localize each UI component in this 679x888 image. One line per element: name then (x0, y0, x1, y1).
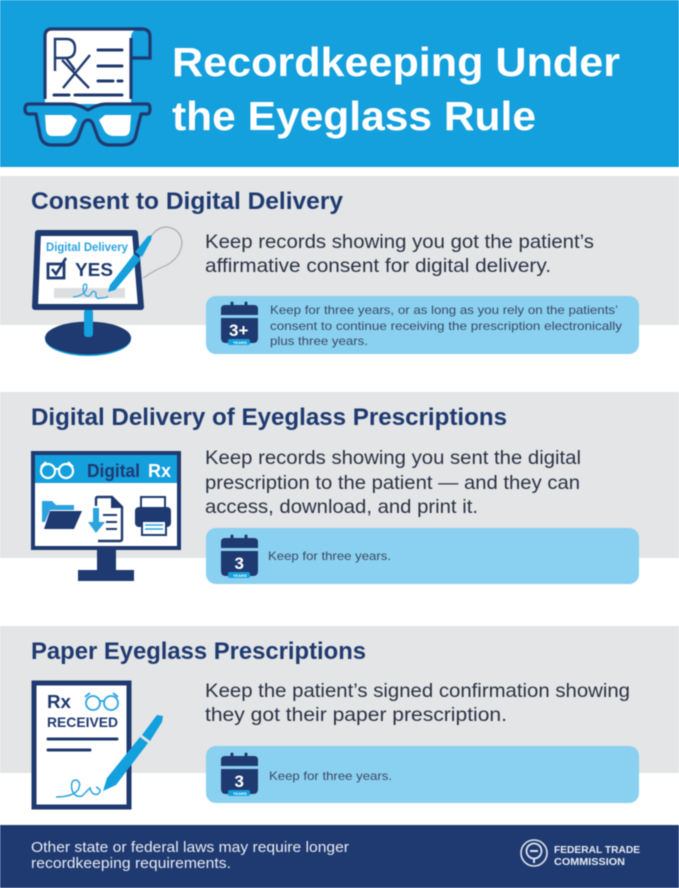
body text: Keep records showing you sent the digital (205, 447, 581, 469)
icon: computer monitor (33, 453, 179, 581)
icon: signed paper document: Rx (47, 692, 71, 712)
callout: retention period: plus three years. (270, 334, 368, 348)
heading: Digital Delivery of Eyeglass Prescriptions (31, 404, 507, 431)
icon: computer monitor: Rx (148, 461, 171, 481)
body text (205, 680, 630, 726)
footer note: recordkeeping requirements. (31, 855, 231, 872)
FTC logo: COMMISSION (554, 857, 625, 868)
header band (0, 0, 679, 167)
body text (205, 231, 594, 277)
body text: they got their paper prescription. (205, 704, 507, 726)
callout: retention period (206, 296, 639, 354)
icon: computer monitor: Digital (87, 461, 140, 481)
icon: calendar 3 (221, 754, 258, 796)
callout: retention period: Keep for three years. (268, 549, 391, 563)
title: Recordkeeping Under (172, 39, 620, 85)
FTC logo (521, 840, 640, 868)
FTC logo: FEDERAL TRADE (554, 845, 640, 856)
heading: Consent to Digital Delivery (31, 188, 344, 215)
callout: retention period: Keep for three years, or as long as you rely on the patients’ (270, 303, 618, 317)
callout: retention period: consent to continue receiving the prescription electronically (270, 319, 622, 333)
icon: calendar 3: 3 (234, 772, 244, 791)
icon: calendar 3: YEARS (233, 573, 247, 578)
icon: calendar 3+: YEARS (233, 340, 247, 345)
panel: paper eyeglass prescriptions (0, 626, 679, 807)
icon: signature tablet: Digital Delivery (46, 242, 129, 254)
icon: signed paper document (34, 683, 163, 807)
body text: affirmative consent for digital delivery. (205, 255, 551, 277)
body text: Keep records showing you got the patient’s (205, 231, 594, 253)
icon: calendar 3: YEARS (233, 791, 247, 796)
body text: Keep the patient’s signed confirmation showing (205, 680, 630, 702)
title: the Eyeglass Rule (172, 93, 536, 139)
callout: retention period (206, 528, 639, 584)
footer note: Other state or federal laws may require longer (31, 839, 349, 856)
icon: calendar 3+: 3+ (229, 321, 248, 340)
footer band (0, 825, 679, 888)
title (172, 39, 620, 139)
body text: prescription to the patient — and they can (205, 472, 580, 494)
icon: prescription and glasses (25, 29, 150, 145)
icon: signature tablet (35, 227, 182, 356)
icon: signature tablet: YES (75, 260, 113, 280)
body text (205, 447, 581, 518)
callout: retention period (206, 746, 639, 803)
icon: calendar 3 (221, 536, 258, 578)
footer note (31, 839, 349, 872)
icon: calendar 3+ (221, 303, 258, 345)
icon: calendar 3: 3 (234, 554, 244, 573)
heading: Paper Eyeglass Prescriptions (31, 638, 366, 665)
callout: retention period: Keep for three years. (269, 769, 392, 783)
panel: consent to digital delivery (0, 176, 679, 356)
body text: access, download, and print it. (205, 496, 478, 518)
icon: signed paper document: RECEIVED (47, 714, 118, 730)
panel: digital delivery of eyeglass prescriptions (0, 392, 679, 584)
